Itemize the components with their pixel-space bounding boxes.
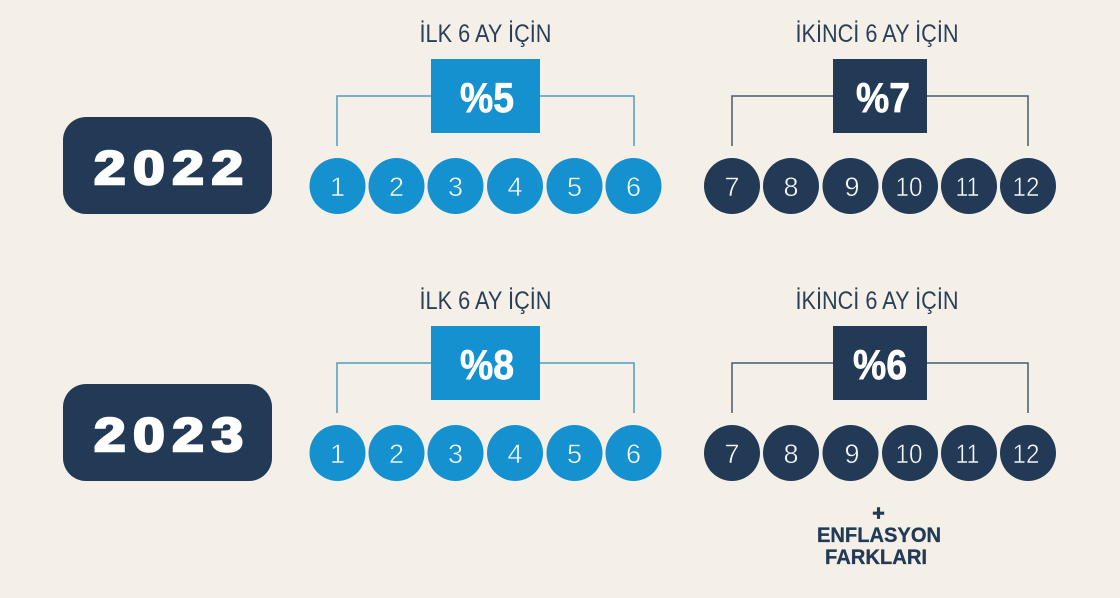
- month circles: 7 to 12: [704, 425, 1056, 481]
- row: 2023: [63, 286, 1056, 569]
- heading: first half 2022: İLK 6 AY İÇİN: [420, 19, 552, 48]
- month circles: 1 to 6: 2: [389, 172, 404, 202]
- rate box: %6: %6: [853, 341, 907, 388]
- rate box: %6: [833, 326, 927, 400]
- month circles: 7 to 12: 11: [956, 172, 980, 202]
- month circles: 1 to 6: 6: [626, 172, 641, 202]
- month circles: 1 to 6: 4: [507, 172, 523, 202]
- bracket: first half 2022: [337, 96, 634, 146]
- note: plus inflation differences: [817, 502, 941, 569]
- month circles: 1 to 6: 6: [626, 439, 641, 469]
- month circles: 7 to 12: 10: [896, 439, 922, 469]
- month circles: 1 to 6: [310, 425, 662, 481]
- month circles: 1 to 6: 1: [330, 439, 345, 469]
- heading: second half 2022: İKİNCİ 6 AY İÇİN: [796, 19, 958, 48]
- heading: first half 2023: İLK 6 AY İÇİN: [420, 286, 552, 315]
- note: plus inflation differences: ENFLASYON: [817, 524, 941, 547]
- rate box: %5: [431, 59, 540, 133]
- month circles: 7 to 12: 7: [724, 439, 740, 469]
- year badge: 2023: [63, 384, 272, 481]
- month circles: 1 to 6: [310, 158, 662, 214]
- row: 2022: [63, 19, 1056, 214]
- rate box: %7: [833, 59, 927, 133]
- month circles: 7 to 12: 12: [1012, 439, 1040, 469]
- rate box: %5: %5: [460, 74, 514, 121]
- year badge: 2022: 2022: [94, 142, 251, 195]
- month circles: 1 to 6: 3: [448, 439, 463, 469]
- year badge: 2022: [63, 117, 272, 214]
- month circles: 7 to 12: 8: [783, 439, 799, 469]
- month circles: 7 to 12: 9: [844, 172, 860, 202]
- month circles: 7 to 12: [704, 158, 1056, 214]
- heading: second half 2023: İKİNCİ 6 AY İÇİN: [796, 286, 958, 315]
- note: plus inflation differences: FARKLARI: [825, 546, 927, 569]
- month circles: 7 to 12: 7: [724, 172, 740, 202]
- month circles: 1 to 6: 2: [389, 439, 404, 469]
- month circles: 7 to 12: 8: [783, 172, 799, 202]
- bracket: second half 2022: [732, 96, 1028, 146]
- bracket: first half 2023: [337, 363, 634, 413]
- rate box: %8: %8: [460, 341, 514, 388]
- rate box: %7: %7: [856, 74, 910, 121]
- month circles: 1 to 6: 5: [567, 172, 582, 202]
- note: plus inflation differences: +: [872, 502, 885, 525]
- year badge: 2023: 2023: [94, 409, 251, 462]
- month circles: 7 to 12: 11: [956, 439, 980, 469]
- rate box: %8: [431, 326, 540, 400]
- month circles: 7 to 12: 10: [896, 172, 922, 202]
- month circles: 1 to 6: 1: [330, 172, 345, 202]
- month circles: 1 to 6: 5: [567, 439, 582, 469]
- month circles: 7 to 12: 9: [844, 439, 860, 469]
- bracket: second half 2023: [732, 363, 1028, 413]
- month circles: 1 to 6: 3: [448, 172, 463, 202]
- month circles: 1 to 6: 4: [507, 439, 523, 469]
- month circles: 7 to 12: 12: [1012, 172, 1040, 202]
